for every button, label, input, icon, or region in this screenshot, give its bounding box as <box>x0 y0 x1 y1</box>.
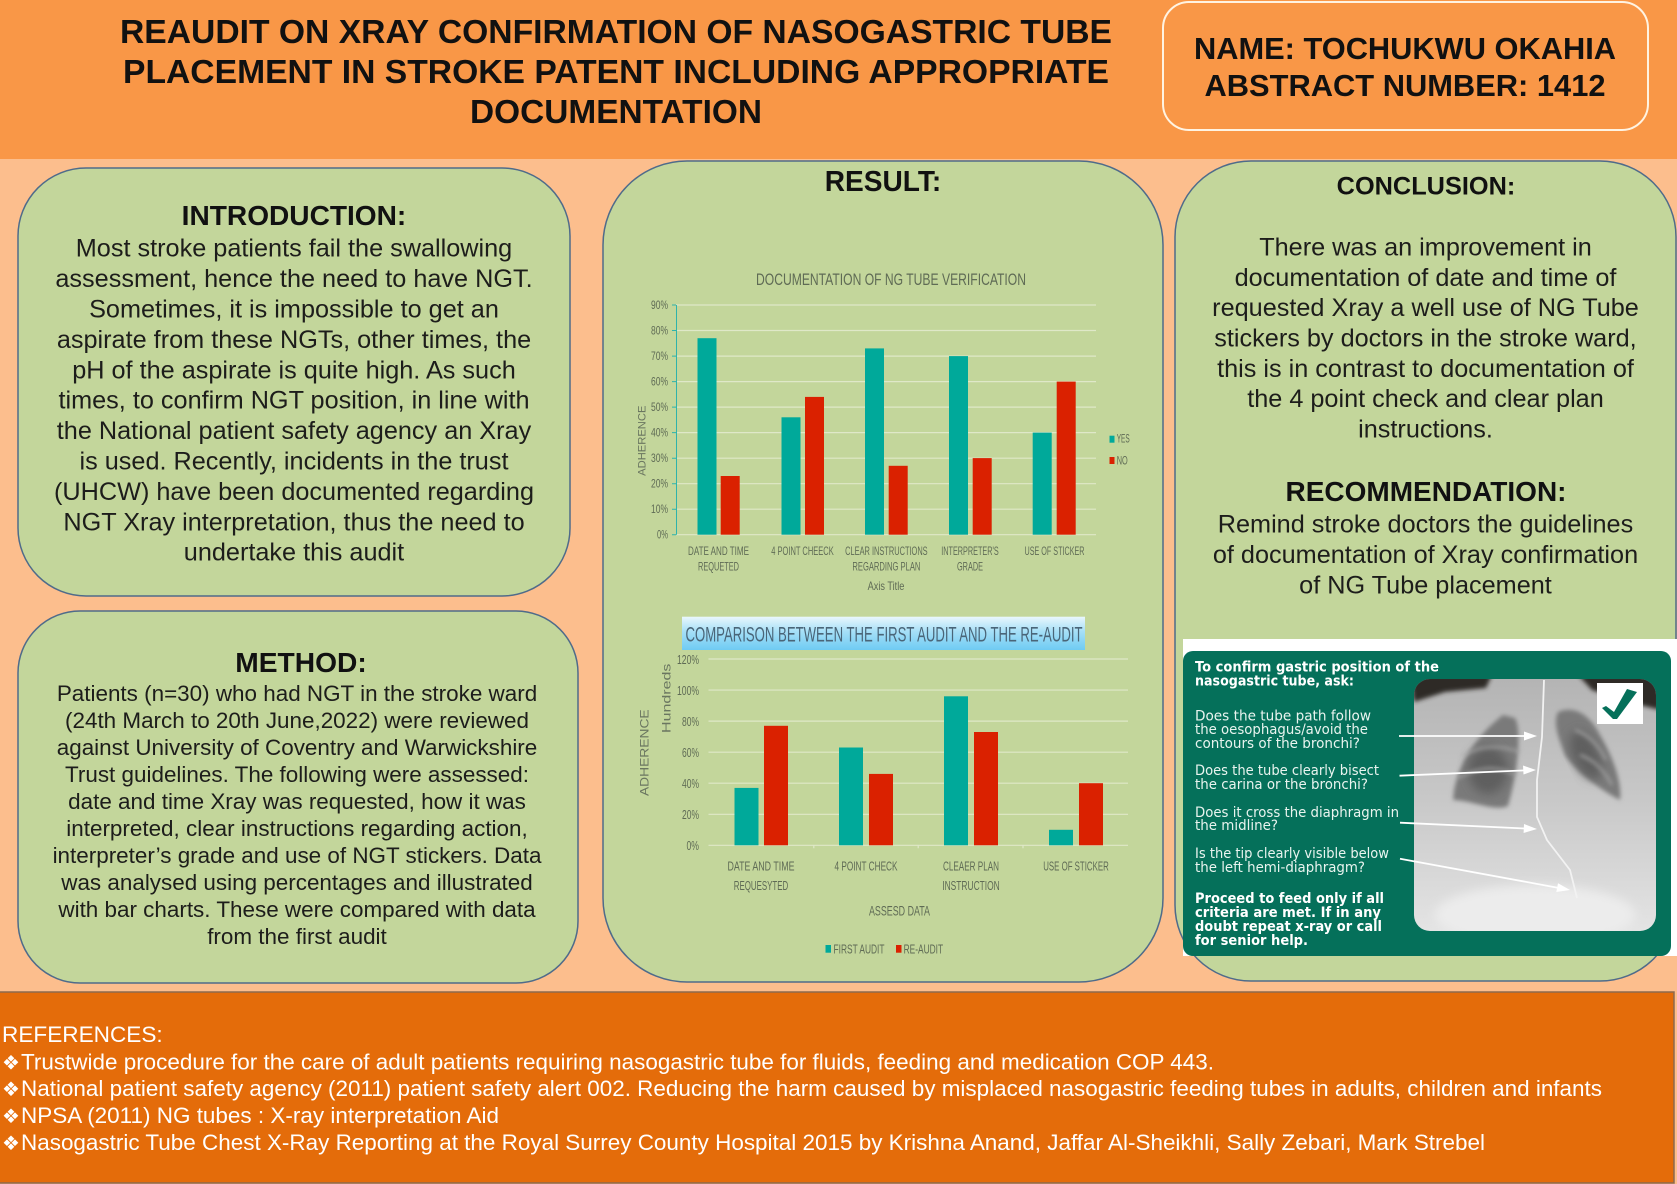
legend: NO <box>1117 453 1128 467</box>
reference list <box>2 1050 1602 1155</box>
category labels: REQUETED <box>698 560 739 574</box>
y axis titles: ADHERENCE <box>638 709 652 796</box>
introduction text: Sometimes, it is impossible to get an <box>89 296 499 324</box>
introduction text: assessment, hence the need to have NGT. <box>55 265 533 293</box>
heading: conclusion: CONCLUSION: <box>1337 172 1515 200</box>
category labels: CLEAR INSTRUCTIONS <box>845 544 928 558</box>
method text: Trust guidelines. The following were assessed: <box>65 762 529 787</box>
reference list: Trustwide procedure for the care of adult patients requiring nasogastric tube for fluids, feeding and medication COP 443. <box>21 1050 1214 1074</box>
reference list: ❖ <box>2 1077 20 1101</box>
y axis tick labels: 0% <box>686 838 699 853</box>
author box: ABSTRACT NUMBER: 1412 <box>1204 68 1606 103</box>
y axis title: ADHERENCE <box>636 406 648 476</box>
method text: against University of Coventry and Warwickshire <box>57 735 537 760</box>
recommendation text <box>1213 511 1638 600</box>
y axis tick labels <box>677 652 699 853</box>
aid text: Does the tube clearly bisect <box>1195 763 1379 779</box>
aid text: the left hemi-diaphragm? <box>1195 860 1365 876</box>
y axis tick labels: 20% <box>651 477 668 491</box>
reference list: National patient safety agency (2011) patient safety alert 002. Reducing the harm caused by misplaced nasogastric feeding tubes in adults, children and infants <box>21 1076 1602 1101</box>
category labels: 4 POINT CHECK <box>834 859 898 874</box>
reference list: ❖ <box>2 1104 20 1128</box>
y axis tick labels: 80% <box>682 714 699 729</box>
introduction text: the National patient safety agency an Xray <box>57 417 532 445</box>
method text: (24th March to 20th June,2022) were reviewed <box>65 708 529 733</box>
y axis tick labels: 0% <box>657 528 668 542</box>
reference list: ❖ <box>2 1050 20 1074</box>
conclusion text: instructions. <box>1358 415 1493 443</box>
introduction text: is used. Recently, incidents in the trust <box>80 448 508 476</box>
tick badge <box>1597 683 1643 724</box>
arrows <box>1399 732 1570 892</box>
conclusion text: this is in contrast to documentation of <box>1217 355 1635 383</box>
references heading: REFERENCES: <box>2 1022 163 1047</box>
aid text: Proceed to feed only if all <box>1195 891 1384 907</box>
method text <box>53 681 542 949</box>
y axis tick labels: 40% <box>651 426 668 440</box>
y axis tick labels: 60% <box>682 745 699 760</box>
category labels: DATE AND TIME <box>688 544 749 558</box>
chart title: COMPARISON BETWEEN THE FIRST AUDIT AND THE RE-AUDIT <box>686 624 1083 647</box>
category labels: CLEAER PLAN <box>943 859 999 874</box>
aid text: To confirm gastric position of the <box>1195 660 1439 676</box>
introduction text: undertake this audit <box>184 539 404 567</box>
y axis tick labels: 50% <box>651 400 668 414</box>
method text: with bar charts. These were compared with data <box>57 897 536 922</box>
category labels: DATE AND TIME <box>728 859 795 874</box>
y axis tick labels: 40% <box>682 776 699 791</box>
category labels: GRADE <box>957 560 983 574</box>
title <box>120 14 1112 131</box>
panel: conclusion and recommendation <box>1175 161 1676 981</box>
title: REAUDIT ON XRAY CONFIRMATION OF NASOGASTRIC TUBE <box>120 14 1112 51</box>
aid text: for senior help. <box>1195 933 1308 949</box>
bar chart: comparison between first audit and re-audit <box>638 617 1128 956</box>
reference list: Nasogastric Tube Chest X-Ray Reporting at the Royal Surrey County Hospital 2015 by Krishna Anand, Jaffar Al-Sheikhli, Sally Zebari, Mark Strebel <box>21 1130 1485 1155</box>
aid text: doubt repeat x-ray or call <box>1195 919 1382 935</box>
category labels: REQUESYTED <box>734 878 788 893</box>
y axis tick labels: 30% <box>651 451 668 465</box>
category labels: USE OF STICKER <box>1043 859 1109 874</box>
aid text: nasogastric tube, ask: <box>1195 674 1354 690</box>
aid text: Does it cross the diaphragm in <box>1195 805 1399 821</box>
reference list: NPSA (2011) NG tubes : X-ray interpretation Aid <box>21 1103 499 1128</box>
heading: recommendation: RECOMMENDATION: <box>1286 476 1566 507</box>
category labels: ASSESD DATA <box>869 904 930 919</box>
category labels: INSTRUCTION <box>942 878 1000 893</box>
title: PLACEMENT IN STROKE PATENT INCLUDING APPROPRIATE <box>123 54 1109 91</box>
category labels: Axis Title <box>868 579 905 593</box>
aid text: contours of the bronchi? <box>1195 736 1360 752</box>
aid text: the carina or the bronchi? <box>1195 777 1368 793</box>
aid text: Is the tip clearly visible below <box>1195 846 1389 862</box>
aid text <box>1195 660 1439 949</box>
introduction text: aspirate from these NGTs, other times, the <box>57 326 531 354</box>
category labels: INTERPRETER'S <box>941 544 999 558</box>
conclusion text: There was an improvement in <box>1259 234 1592 262</box>
chart title <box>682 617 1085 650</box>
introduction text: times, to confirm NGT position, in line with <box>58 387 530 415</box>
recommendation text: Remind stroke doctors the guidelines <box>1218 511 1633 539</box>
aid text: criteria are met. If in any <box>1195 905 1381 921</box>
legend: YES <box>1117 432 1130 446</box>
conclusion text <box>1212 234 1639 443</box>
introduction text <box>54 235 534 567</box>
category labels: USE OF STICKER <box>1024 544 1085 558</box>
method text: interpreter’s grade and use of NGT stickers. Data <box>53 843 542 868</box>
bar chart: documentation of NG tube verification <box>636 270 1130 593</box>
category labels <box>688 544 1085 593</box>
reference list: ❖ <box>2 1131 20 1155</box>
panel: result <box>603 161 1163 982</box>
panel: introduction <box>18 168 570 596</box>
method text: date and time Xray was requested, how it was <box>68 789 526 814</box>
method text: interpreted, clear instructions regarding action, <box>66 816 528 841</box>
bars <box>698 338 1076 535</box>
y axis tick labels: 20% <box>682 807 699 822</box>
y axis tick labels: 70% <box>651 349 668 363</box>
category labels: REGARDING PLAN <box>852 560 920 574</box>
legend <box>826 941 943 956</box>
header band <box>0 0 1677 159</box>
y axis tick labels: 10% <box>651 502 668 516</box>
introduction text: NGT Xray interpretation, thus the need to <box>63 508 525 536</box>
chest x-ray image <box>1410 675 1660 945</box>
recommendation text: of NG Tube placement <box>1299 572 1552 600</box>
conclusion text: the 4 point check and clear plan <box>1247 385 1604 413</box>
y axis tick labels: 80% <box>651 324 668 338</box>
method text: from the first audit <box>207 924 388 949</box>
y axis tick labels: 90% <box>651 298 668 312</box>
y axis tick labels: 120% <box>677 652 699 667</box>
category labels: 4 POINT CHEECK <box>771 544 834 558</box>
legend: RE-AUDIT <box>904 941 943 956</box>
panel: method <box>18 611 578 983</box>
method text: Patients (n=30) who had NGT in the stroke ward <box>57 681 537 706</box>
panel: references <box>0 992 1674 1183</box>
aid text: Does the tube path follow <box>1195 708 1371 724</box>
y axis tick labels <box>651 298 668 542</box>
category labels <box>728 859 1109 919</box>
author box: NAME: TOCHUKWU OKAHIA <box>1194 31 1616 66</box>
y axis titles <box>638 664 674 796</box>
aid text: the oesophagus/avoid the <box>1195 722 1368 738</box>
heading: introduction: INTRODUCTION: <box>182 200 406 231</box>
author box <box>1163 2 1648 130</box>
bar chart: documentation of NG tube verification: DOCUMENTATION OF NG TUBE VERIFICATION <box>756 270 1026 289</box>
conclusion text: requested Xray a well use of NG Tube <box>1212 294 1639 322</box>
bars <box>734 696 1103 845</box>
conclusion text: stickers by doctors in the stroke ward, <box>1214 324 1637 352</box>
method text: was analysed using percentages and illustrated <box>60 870 533 895</box>
y axis tick labels: 100% <box>677 683 699 698</box>
aid text: the midline? <box>1195 818 1278 834</box>
legend: FIRST AUDIT <box>834 941 885 956</box>
y axis tick labels: 60% <box>651 375 668 389</box>
introduction text: (UHCW) have been documented regarding <box>54 478 534 506</box>
conclusion text: documentation of date and time of <box>1235 264 1617 292</box>
figure: NG tube x-ray interpretation aid <box>1183 639 1677 956</box>
recommendation text: of documentation of Xray confirmation <box>1213 541 1638 569</box>
introduction text: pH of the aspirate is quite high. As such <box>72 356 516 384</box>
heading: method: METHOD: <box>235 647 367 678</box>
legend <box>1110 432 1130 467</box>
heading: result: RESULT: <box>825 166 941 198</box>
introduction text: Most stroke patients fail the swallowing <box>76 235 512 263</box>
y axis titles: Hundreds <box>660 664 674 733</box>
title: DOCUMENTATION <box>470 94 762 131</box>
